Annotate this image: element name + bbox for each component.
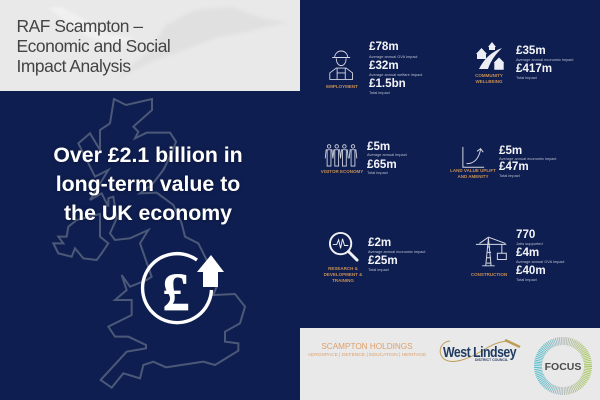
label: AND AMENITY bbox=[457, 174, 489, 179]
figure: 770 bbox=[516, 228, 535, 241]
figure: £40m bbox=[516, 264, 546, 277]
swoosh bbox=[440, 338, 520, 362]
title: RAF Scampton – bbox=[16, 16, 143, 36]
logo: West Lindsey bbox=[440, 338, 520, 362]
label: CONSTRUCTION bbox=[471, 272, 507, 277]
caption: Total impact bbox=[516, 75, 537, 80]
aircraft watermark bbox=[136, 10, 272, 66]
figure: £5m bbox=[499, 144, 522, 157]
figure: £5m bbox=[367, 140, 390, 153]
panel: land value uplift bbox=[450, 144, 556, 179]
caption: Average annual impact bbox=[367, 152, 407, 157]
label: LAND VALUE UPLIFT bbox=[450, 168, 496, 173]
caption: Average annual GVA impact bbox=[369, 54, 418, 59]
headline: long-term value to bbox=[56, 172, 240, 196]
caption: Total impact bbox=[369, 90, 390, 95]
logo: Focus bbox=[534, 337, 592, 395]
label: EMPLOYMENT bbox=[326, 84, 358, 89]
logo: Scampton Holdings: AEROSPACE | DEFENCE | EDUCATION | HERITAGE bbox=[308, 352, 426, 358]
figure: £4m bbox=[516, 246, 539, 259]
figure: £78m bbox=[369, 40, 399, 53]
figure: £35m bbox=[516, 44, 546, 57]
title: Impact Analysis bbox=[16, 56, 131, 76]
caption: Average annual economic impact bbox=[499, 156, 556, 161]
caption: Average annual economic impact bbox=[368, 249, 425, 254]
icon: tower crane bbox=[476, 236, 507, 266]
map of the UK outline bbox=[52, 98, 246, 389]
figure: £47m bbox=[499, 160, 529, 173]
icon: magnifier with pulse bbox=[329, 232, 359, 262]
figure: £32m bbox=[369, 59, 399, 72]
panel: construction bbox=[471, 228, 565, 282]
caption: Total impact bbox=[499, 173, 520, 178]
caption: Total impact bbox=[368, 267, 389, 272]
headline bbox=[53, 143, 243, 225]
icon: four people bbox=[324, 144, 358, 166]
label: RESEARCH & bbox=[328, 266, 358, 271]
icon: houses and road bbox=[476, 42, 504, 70]
panel: logos bbox=[300, 328, 600, 400]
label: WELLBEING bbox=[476, 79, 502, 84]
title bbox=[16, 16, 170, 76]
caption: Average annual GVA impact bbox=[516, 259, 565, 264]
logo: Scampton Holdings: SCAMPTON HOLDINGS bbox=[321, 342, 413, 350]
icon: pound with up arrow: £ bbox=[162, 262, 190, 322]
caption: Total impact bbox=[516, 277, 537, 282]
logo: Scampton Holdings bbox=[308, 342, 426, 358]
caption: Total impact bbox=[367, 170, 388, 175]
label bbox=[324, 266, 362, 283]
figure: £25m bbox=[368, 254, 398, 267]
panel: employment bbox=[326, 40, 422, 95]
headline: the UK economy bbox=[64, 201, 232, 225]
figure: £417m bbox=[516, 62, 552, 75]
subtitle: DISTRICT COUNCIL bbox=[475, 358, 508, 362]
caption: Jobs supported bbox=[516, 241, 543, 246]
icon: worker bbox=[329, 50, 353, 80]
panel: community wellbeing bbox=[475, 42, 574, 84]
label bbox=[475, 73, 503, 84]
label: VISITOR ECONOMY bbox=[321, 169, 363, 174]
figure: £2m bbox=[368, 236, 391, 249]
caption: Average annual welfare impact bbox=[369, 72, 422, 77]
headline: Over £2.1 billion in bbox=[53, 143, 243, 167]
label: TRAINING bbox=[332, 278, 354, 283]
wordmark: FOCUS bbox=[545, 361, 581, 373]
ring bbox=[534, 337, 592, 395]
panel: research and development bbox=[324, 232, 426, 283]
label: DEVELOPMENT & bbox=[324, 272, 362, 277]
icon: pound with up arrow bbox=[140, 252, 224, 324]
figure: £1.5bn bbox=[369, 77, 406, 90]
panel: visitor economy bbox=[320, 140, 407, 175]
label: COMMUNITY bbox=[475, 73, 503, 78]
title: Economic and Social bbox=[16, 36, 170, 56]
figure: £65m bbox=[367, 158, 397, 171]
icon: rising graph bbox=[462, 146, 484, 168]
wordmark: West Lindsey bbox=[443, 344, 516, 360]
label bbox=[450, 168, 496, 179]
panel: title banner bbox=[0, 0, 300, 91]
caption: Average annual economic impact bbox=[516, 57, 573, 62]
